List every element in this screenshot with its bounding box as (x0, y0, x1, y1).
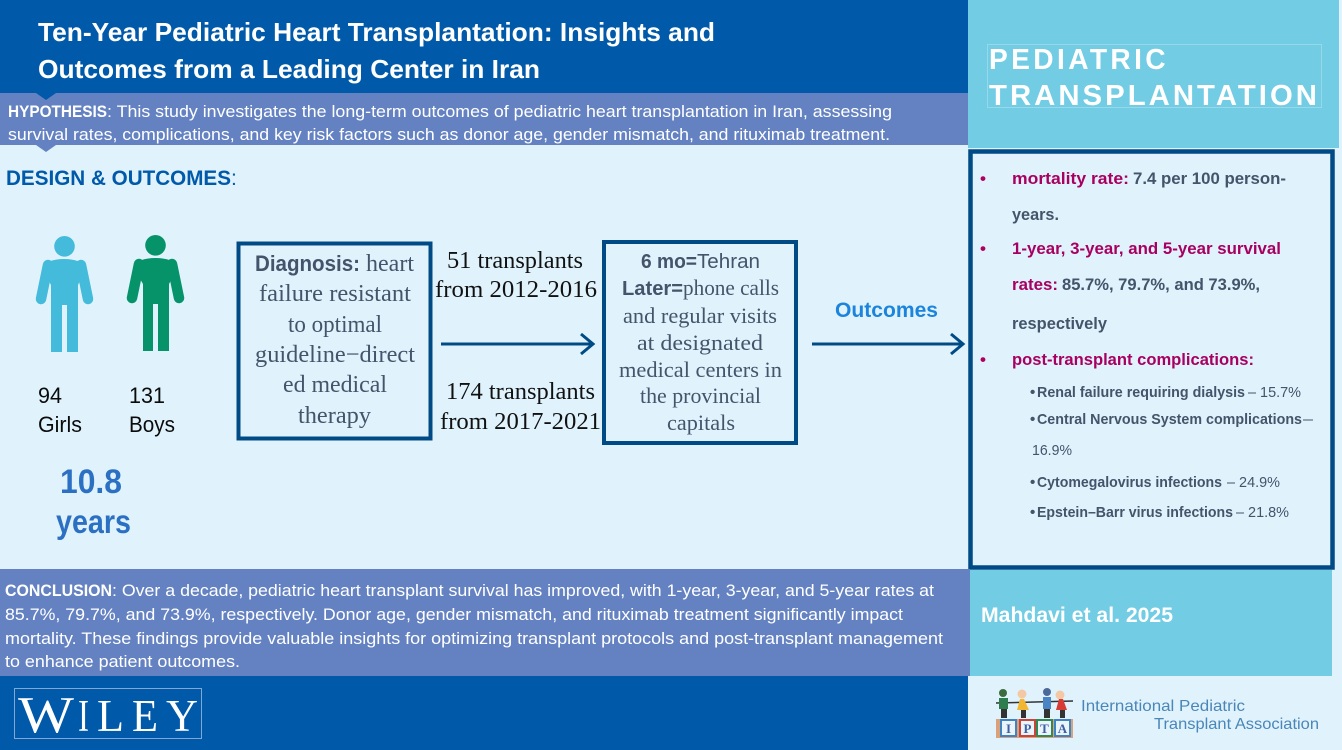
box: diagnosis: ed medical (283, 372, 387, 398)
mortality rate (980, 169, 1286, 224)
logo: International Pediatric Transplant Association: Transplant Association (1154, 716, 1319, 733)
complications list: • (1030, 504, 1035, 521)
mortality rate: years. (1012, 205, 1059, 224)
hypothesis panel: survival rates, complications, and key risk factors such as donor age, gender mismatch, and rituximab treatment. (8, 125, 890, 144)
icon: girl figure (41, 236, 88, 352)
hypothesis panel: : This study investigates the long-term outcomes of pediatric heart transplantation in Iran, assessing (107, 102, 892, 121)
survival rates: 1-year, 3-year, and 5-year survival (1012, 239, 1281, 258)
survival rates: rates: (1012, 275, 1058, 294)
icon: children on blocks: A (1058, 721, 1068, 736)
box: diagnosis: Diagnosis: (255, 251, 360, 276)
complications list: – 15.7% (1248, 384, 1301, 401)
arrow: to follow-up (441, 334, 593, 354)
mortality rate: 7.4 per 100 person- (1133, 169, 1286, 188)
footer bar (0, 676, 968, 750)
logo: Wiley: E (132, 691, 158, 741)
journal panel: Pediatric Transplantation (968, 0, 1339, 148)
label: transplants 2017-2021: from 2017-2021 (440, 409, 601, 435)
box: diagnosis: guideline−direct (255, 342, 415, 368)
survival rates (980, 239, 1281, 333)
box: follow-up: Later= (622, 278, 683, 300)
complications list: • (1030, 384, 1035, 401)
label: boys count: Boys (129, 412, 175, 437)
label: transplants 2012-2016: from 2012-2016 (435, 277, 597, 303)
label: girls count (38, 383, 82, 437)
complications list: – (1303, 411, 1314, 428)
complications list: – 21.8% (1236, 504, 1289, 521)
box: follow-up: at designated (637, 330, 763, 355)
journal panel: Pediatric Transplantation: TRANSPLANTATION (989, 80, 1320, 112)
logo: Wiley (14, 687, 202, 744)
heading: design and outcomes: : (231, 167, 237, 190)
complications list: Cytomegalovirus infections (1037, 474, 1222, 491)
box: follow-up: 6 mo= (641, 251, 697, 273)
hypothesis panel: HYPOTHESIS (8, 102, 107, 121)
label: girls count: Girls (38, 412, 82, 437)
box: follow-up: phone calls (683, 275, 779, 300)
box: follow-up (604, 242, 796, 443)
logo: Wiley: L (97, 691, 124, 741)
conclusion panel: mortality. These findings provide valuable insights for optimizing transplant protocols and post-transplant management (5, 629, 943, 648)
label: transplants 2012-2016 (435, 248, 597, 303)
arrow: to outcomes (812, 334, 963, 354)
logo: Wiley: Y (166, 691, 198, 741)
heading: design and outcomes: DESIGN & OUTCOMES (6, 167, 231, 190)
complications list: • (1030, 411, 1035, 428)
logo: International Pediatric Transplant Association: International Pediatric (1081, 698, 1245, 715)
complications list: Renal failure requiring dialysis (1037, 384, 1245, 401)
survival rates: respectively (1012, 314, 1108, 333)
stat: mean age: years (56, 503, 131, 540)
box: follow-up: capitals (667, 410, 735, 435)
conclusion panel (0, 569, 970, 676)
label: boys count (129, 383, 175, 437)
complications list: 16.9% (1032, 442, 1072, 459)
complications list: • (1030, 474, 1035, 491)
stat: mean age: 10.8 (60, 463, 122, 501)
label: transplants 2012-2016: 51 transplants (447, 248, 583, 274)
hypothesis panel (0, 93, 968, 152)
icon: children on blocks: P (1024, 721, 1032, 736)
logo: Wiley: I (78, 691, 89, 741)
logo: Wiley: W (18, 687, 74, 744)
box: follow-up: Tehran (697, 251, 760, 273)
label: transplants 2017-2021: 174 transplants (446, 379, 595, 405)
stat: mean age (56, 463, 131, 540)
box: follow-up: medical centers in (619, 357, 782, 382)
label: girls count: 94 (38, 383, 62, 408)
box: diagnosis: to optimal (288, 312, 382, 338)
survival rates: • (980, 239, 986, 258)
box: follow-up: and regular visits (623, 303, 777, 328)
panel: outcomes results (970, 152, 1332, 568)
icon: children on blocks: I (1006, 721, 1011, 736)
icon: children on blocks: T (1040, 721, 1049, 736)
post-transplant complications: post-transplant complications: (1012, 350, 1254, 369)
survival rates: 85.7%, 79.7%, and 73.9%, (1062, 275, 1260, 294)
mortality rate: • (980, 169, 986, 188)
title banner (0, 0, 968, 93)
box: diagnosis: therapy (298, 403, 371, 429)
post-transplant complications: • (980, 350, 986, 369)
title banner: Outcomes from a Leading Center in Iran (38, 54, 540, 84)
citation panel: Mahdavi et al. 2025 (981, 604, 1173, 627)
complications list: Epstein–Barr virus infections (1037, 504, 1233, 521)
label: transplants 2017-2021 (440, 379, 601, 435)
box: follow-up: the provincial (640, 383, 761, 408)
journal panel: Pediatric Transplantation: PEDIATRIC (989, 44, 1169, 76)
mortality rate: mortality rate: (1012, 169, 1129, 188)
conclusion panel: CONCLUSION (5, 581, 112, 600)
icon: boy figure (132, 235, 179, 351)
label: boys count: 131 (129, 383, 165, 408)
citation panel (970, 570, 1332, 676)
label: outcomes: Outcomes (835, 299, 938, 322)
box: diagnosis: heart (366, 251, 414, 277)
complications list (1030, 384, 1314, 521)
complications list: Central Nervous System complications (1037, 411, 1302, 428)
title banner: Ten-Year Pediatric Heart Transplantation: Insights and (38, 17, 715, 47)
icon: children on blocks (996, 688, 1073, 738)
complications list: – 24.9% (1227, 474, 1280, 491)
box: diagnosis (238, 244, 430, 438)
conclusion panel: to enhance patient outcomes. (5, 652, 240, 671)
conclusion panel: 85.7%, 79.7%, and 73.9%, respectively. Donor age, gender mismatch, and rituximab treatment significantly impact (5, 605, 903, 624)
box: diagnosis: failure resistant (259, 281, 411, 307)
conclusion panel: : Over a decade, pediatric heart transplant survival has improved, with 1-year, 3-year, and 5-year rates at (112, 581, 934, 600)
logo: International Pediatric Transplant Association (996, 688, 1319, 738)
